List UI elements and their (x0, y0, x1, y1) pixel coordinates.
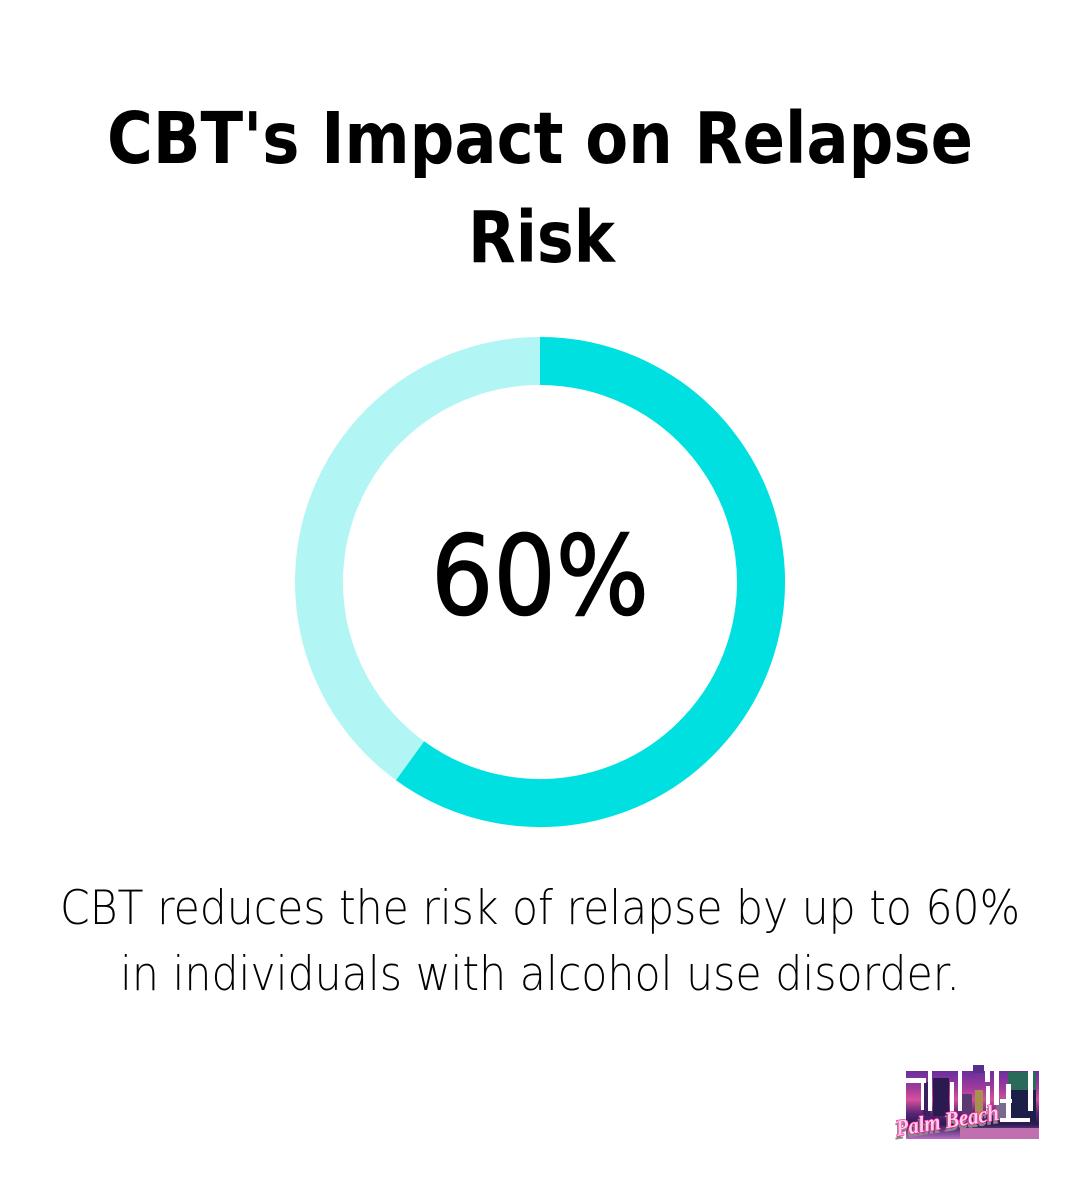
title (107, 97, 973, 279)
title: CBT's Impact on Relapse (107, 97, 973, 180)
donut track: remaining 40% (319, 361, 761, 803)
title: Risk (468, 196, 617, 279)
logo script text shadow: Palm Beach (892, 1103, 1000, 1144)
description text: in individuals with alcohol use disorder. (120, 947, 960, 1002)
logo: Amity Palm Beach (892, 1065, 1039, 1144)
logo white letter gaps (906, 1069, 1033, 1122)
donut centre value: 60% (431, 512, 649, 640)
description text (60, 881, 1020, 1002)
logo city background (906, 1065, 1039, 1139)
donut chart: 60% (319, 361, 761, 803)
logo script text: Palm Beach (893, 1100, 1001, 1141)
donut value arc: 60% (410, 361, 761, 803)
